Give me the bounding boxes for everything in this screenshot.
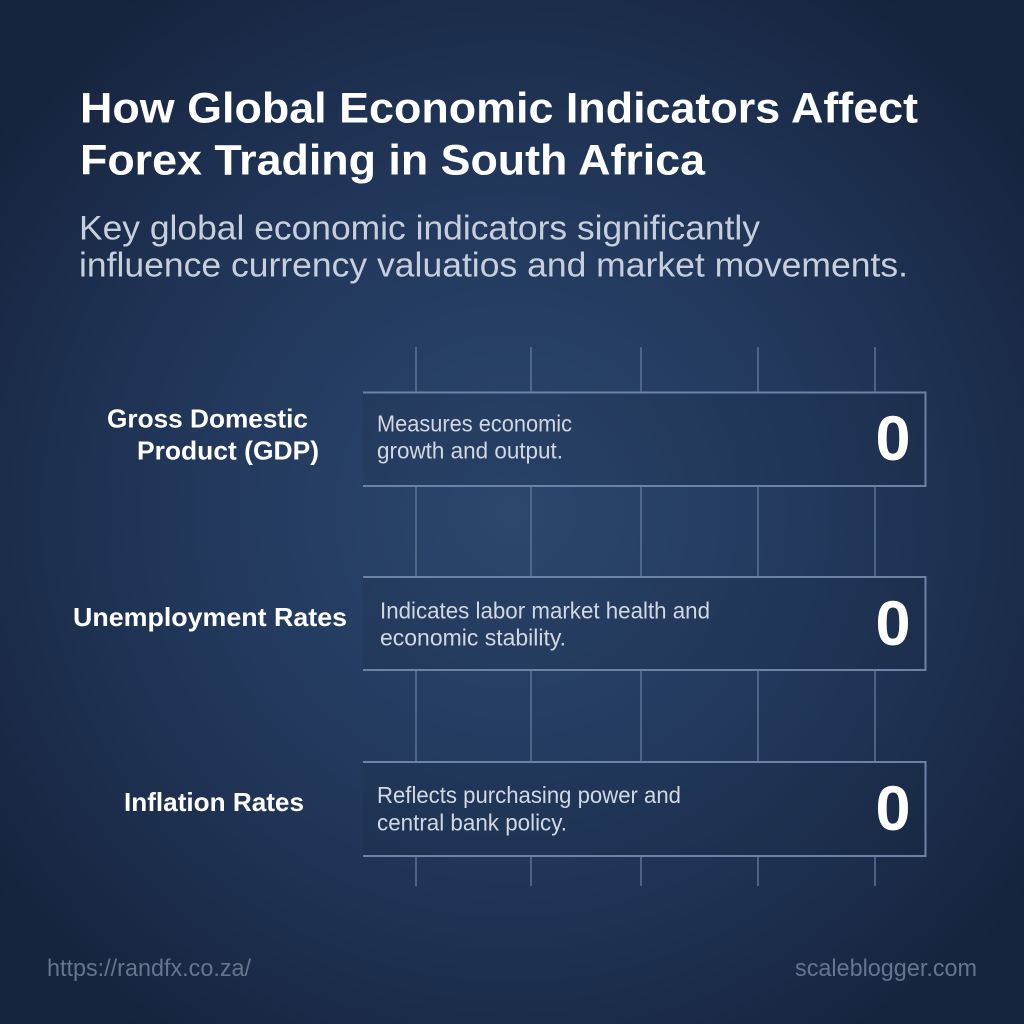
description: GDP: [377, 410, 572, 464]
panel: Unemployment: [363, 577, 926, 670]
value: GDP: 0: [875, 404, 911, 474]
description: Unemployment: economic stability.: [380, 624, 566, 650]
title: How Global Economic Indicators Affect: [80, 84, 918, 132]
label: GDP: [107, 404, 319, 466]
description: Unemployment: Indicates labor market health and: [380, 598, 710, 624]
description: Inflation: central bank policy.: [377, 810, 567, 836]
subtitle: [79, 210, 908, 284]
row: Inflation: [124, 762, 926, 856]
label: GDP: Gross Domestic: [107, 404, 308, 434]
title: Forex Trading in South Africa: [80, 136, 706, 184]
panel: GDP: [363, 392, 926, 486]
description: Inflation: Reflects purchasing power and: [377, 782, 681, 808]
footer: left source: https://randfx.co.za/: [47, 955, 251, 982]
label: Unemployment: Unemployment Rates: [73, 602, 347, 632]
description: GDP: Measures economic: [377, 410, 572, 436]
label: Inflation: Inflation Rates: [124, 787, 304, 817]
description: GDP: growth and output.: [377, 438, 563, 464]
vertical grid lines: [416, 347, 875, 886]
row: GDP: [107, 392, 926, 486]
description: Inflation: [377, 782, 681, 836]
row: Unemployment: [73, 577, 926, 670]
footer: right source: scaleblogger.com: [795, 955, 977, 982]
label: GDP: Product (GDP): [137, 436, 319, 466]
subtitle: Key global economic indicators significantly: [79, 210, 761, 248]
value: Unemployment: 0: [875, 589, 911, 659]
panel: Inflation: [363, 762, 926, 856]
subtitle: influence currency valuatios and market movements.: [79, 246, 908, 284]
value: Inflation: 0: [875, 774, 911, 844]
title: [80, 84, 918, 184]
description: Unemployment: [380, 598, 710, 650]
